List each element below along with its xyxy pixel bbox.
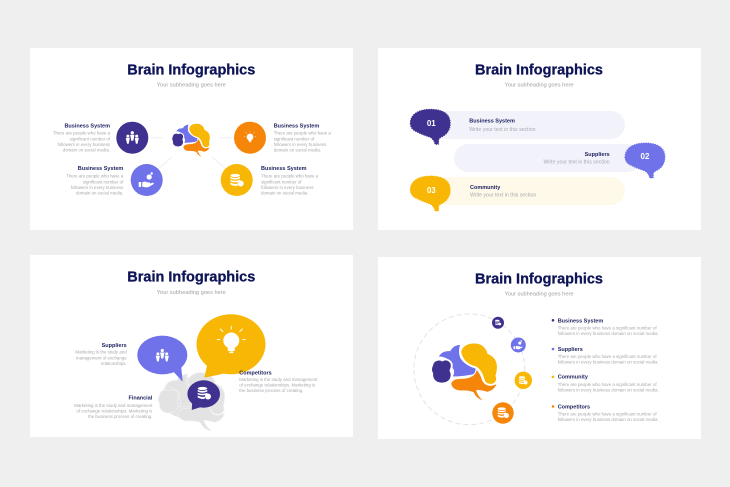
text block: bottom right: followers in every business [261, 185, 314, 190]
text block: bottom left: domain on social media. [76, 190, 123, 196]
text block: suppliers: Suppliers [102, 343, 127, 349]
text block: bottom left: significant number of [83, 179, 124, 184]
text block: financial: the business process of creating. [88, 414, 152, 419]
row 01: Write your text in this section [469, 127, 536, 133]
text block: top right: There are people who have a [274, 131, 331, 136]
text block: competitors: of exchange relationships. Marketing is [239, 382, 316, 388]
circle icon: people [116, 122, 148, 154]
text block: financial: Marketing is the study and management [74, 403, 153, 408]
circle icon: bulb [234, 122, 266, 154]
subtitle: Your subheading goes here [157, 82, 226, 88]
text block: bottom right: Business System [261, 166, 307, 172]
title: Brain Infographics [127, 62, 255, 79]
title: Brain Infographics [127, 269, 255, 286]
row 01: Business System [469, 119, 515, 125]
title: Brain Infographics [475, 271, 603, 288]
bubble: suppliers [137, 336, 187, 382]
text block: suppliers: Marketing is the study and [75, 350, 127, 355]
list item: community: Community [558, 375, 589, 381]
row 02 [454, 143, 665, 178]
text block: top right: significant number of [274, 136, 315, 141]
list item: competitors [552, 404, 659, 422]
text block: competitors: the business process of creating. [239, 388, 303, 393]
list item: suppliers: followers in every business domain on social media. [558, 360, 659, 365]
subtitle: Your subheading goes here [157, 290, 226, 296]
text block: bottom right [261, 166, 319, 196]
brain illustration [172, 123, 210, 157]
text block: bottom right: There are people who have a [261, 174, 319, 179]
row 03 [410, 176, 625, 211]
list item: community [552, 375, 659, 392]
text block: competitors: Marketing is the study and management [239, 377, 318, 382]
row 02: 02 [641, 152, 650, 161]
row 01: 01 [427, 119, 436, 128]
orbit icon: orange [492, 402, 514, 424]
text block: financial: of exchange relationships. Marketing is [76, 408, 153, 413]
text block: top left: followers in every business [58, 142, 111, 147]
text block: top right: Business System [274, 123, 319, 129]
row 03: Community [470, 185, 501, 191]
list item: business system: Business System [558, 318, 603, 324]
bubble: financial [187, 380, 220, 410]
row 01 [410, 109, 625, 144]
list item: competitors: followers in every business domain on social media. [558, 417, 659, 422]
panel: speech bubbles over brain [30, 255, 353, 437]
text block: top left: Business System [64, 123, 110, 129]
text block: bottom left: followers in every business [71, 185, 124, 190]
list item: business system [552, 318, 659, 336]
text block: top left: There are people who have a [53, 131, 111, 136]
orbit icon: purple [511, 338, 526, 352]
bubble: competitors [196, 314, 266, 378]
row 03: 03 [427, 186, 436, 195]
subtitle: Your subheading goes here [504, 292, 574, 298]
text block: top left: significant number of [69, 136, 111, 141]
list item: suppliers: Suppliers [558, 347, 583, 353]
row 02: Suppliers [585, 152, 610, 158]
text block: suppliers: relationships. [101, 361, 127, 366]
text block: bottom left: Business System [78, 166, 123, 172]
text block: competitors [239, 370, 318, 393]
panel: brain with four circles [30, 48, 353, 230]
list item: suppliers [552, 347, 659, 365]
title: Brain Infographics [475, 62, 603, 79]
row 03: Write your text in this section [470, 193, 536, 199]
text block: suppliers [75, 343, 127, 366]
text block: financial [74, 396, 153, 419]
text block: competitors: Competitors [239, 370, 272, 376]
orbit icon: dark [492, 317, 504, 329]
subtitle: Your subheading goes here [504, 82, 574, 88]
text block: bottom right: domain on social media. [261, 190, 308, 196]
orbit icon: yellow [515, 372, 532, 389]
list item: suppliers: There are people who have a significant number of [558, 354, 657, 359]
text block: top left: domain on social media. [63, 148, 110, 152]
list item: community: There are people who have a significant number of [558, 382, 657, 387]
list item: business system: There are people who have a significant number of [558, 326, 657, 331]
list item: competitors: Competitors [558, 404, 590, 410]
text block: top right: followers in every business [274, 142, 327, 147]
row 02: Write your text in this section [543, 160, 610, 166]
text block: top right [274, 123, 331, 152]
text block: bottom left: There are people who have a [66, 174, 124, 179]
list item: competitors: There are people who have a significant number of [558, 412, 657, 417]
text block: top left [53, 123, 111, 152]
text block: bottom right: significant number of [261, 179, 302, 184]
panel: brain with orbit list [378, 257, 701, 439]
panel: numbered brain rows [378, 48, 701, 230]
text block: suppliers: management of exchange [76, 355, 127, 360]
brain illustration [431, 343, 497, 401]
list item: business system: followers in every business domain on social media. [558, 331, 659, 336]
text block: top right: domain on social media. [274, 148, 321, 152]
list item: community: followers in every business domain on social media. [558, 387, 659, 392]
text block: bottom left [66, 166, 124, 196]
grey brain [158, 373, 225, 431]
circle icon: database [221, 164, 253, 196]
circle icon: hand with coin [131, 164, 163, 196]
text block: financial: Financial [128, 396, 153, 402]
